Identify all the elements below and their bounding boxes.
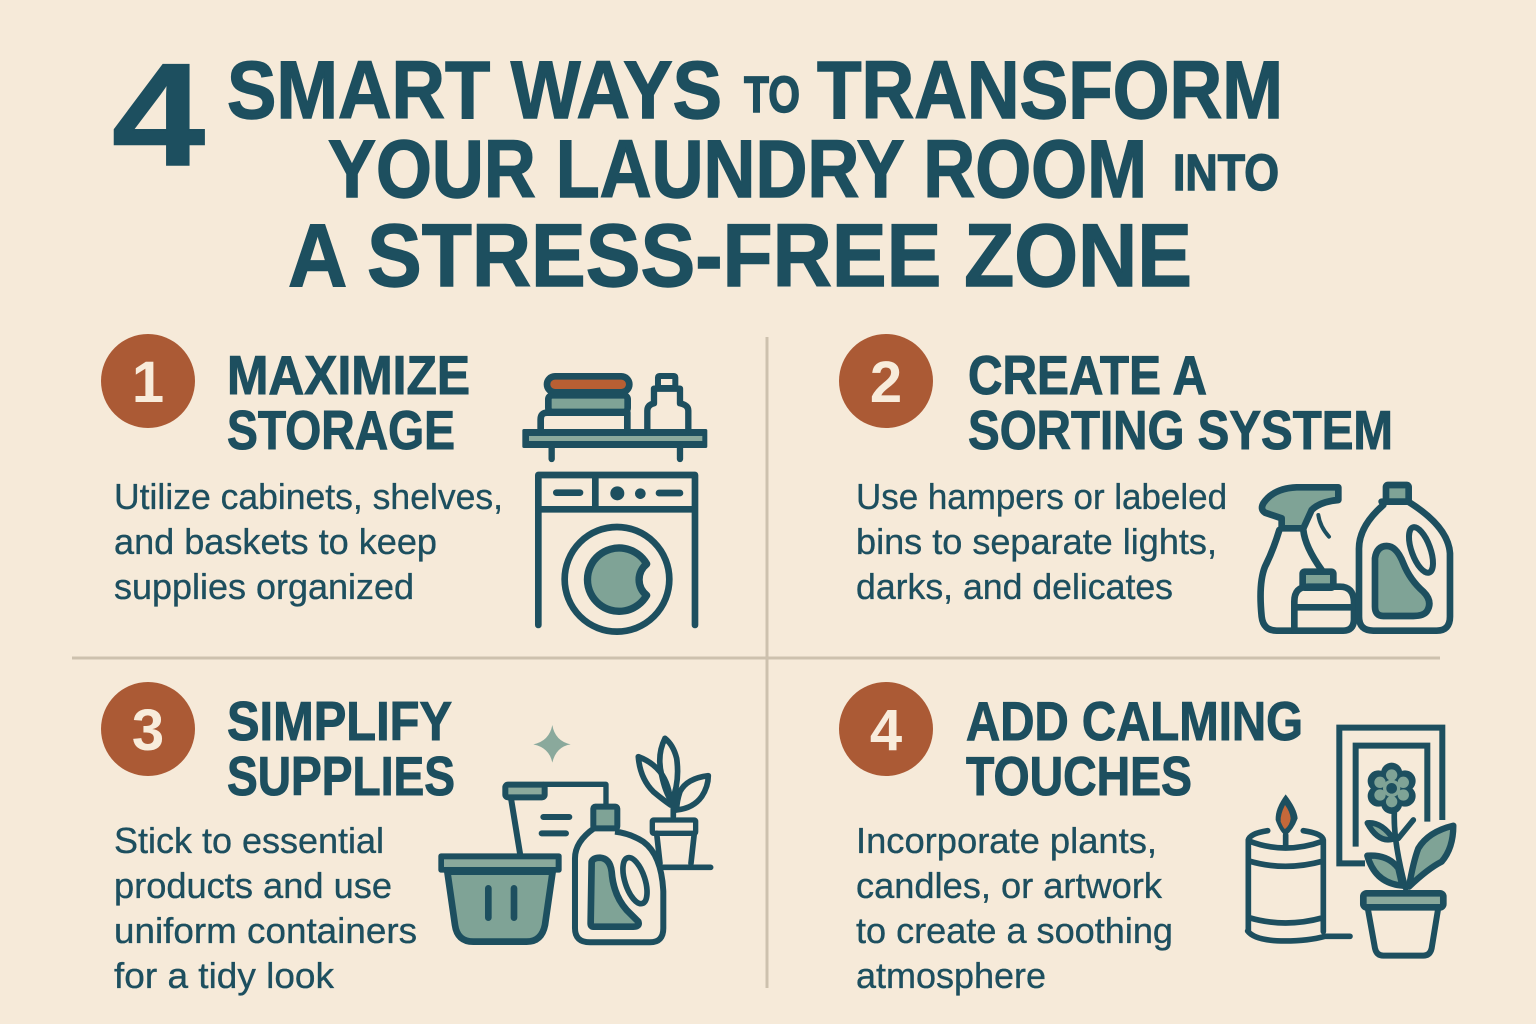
number badge 4 (839, 682, 933, 776)
panel: sorting system (839, 334, 1450, 631)
heading: add calming touches: ADD CALMING (966, 690, 1303, 752)
title: 4 (112, 33, 205, 196)
panel: simplify supplies (101, 682, 711, 996)
heading: maximize storage (227, 344, 470, 461)
number badge 1 (101, 334, 195, 428)
title: INTO (1173, 144, 1279, 201)
panel: calming touches (839, 682, 1453, 996)
body text 4: candles, or artwork (856, 865, 1163, 906)
title: TRANSFORM (817, 45, 1283, 136)
body text 2: darks, and delicates (856, 566, 1173, 607)
title: A STRESS-FREE ZONE (288, 205, 1192, 305)
heading: create a sorting system (968, 344, 1393, 461)
body text 4: atmosphere (856, 955, 1046, 996)
heading: maximize storage: MAXIMIZE (227, 344, 470, 406)
heading: maximize storage: STORAGE (227, 399, 455, 461)
icon: basket, detergent bottle, plant and sparkle (438, 725, 711, 942)
number badge 3: 3 (132, 698, 164, 763)
body text 4: Incorporate plants, (856, 820, 1157, 861)
heading: simplify supplies: SUPPLIES (227, 745, 455, 807)
body text 3: for a tidy look (114, 955, 335, 996)
icon: candle, framed art and potted flower (1248, 728, 1453, 956)
heading: create a sorting system: CREATE A (968, 344, 1207, 406)
icon: shelf and washing machine (522, 376, 707, 632)
number badge 2: 2 (870, 350, 902, 415)
heading: create a sorting system: SORTING SYSTEM (968, 399, 1393, 461)
body text 3: products and use (114, 865, 392, 906)
body text 3: Stick to essential (114, 820, 384, 861)
body text 4 (856, 820, 1173, 996)
number badge 3 (101, 682, 195, 776)
body text 1: Utilize cabinets, shelves, (114, 476, 503, 517)
number badge 1: 1 (132, 350, 164, 415)
heading: simplify supplies (227, 690, 455, 807)
panel: maximize storage (101, 334, 707, 632)
body text 4: to create a soothing (856, 910, 1173, 951)
title: TO (744, 66, 800, 123)
number badge 4: 4 (870, 698, 902, 763)
body text 2 (856, 476, 1227, 607)
icon: spray bottle, jar and detergent jug (1261, 485, 1450, 631)
title: YOUR LAUNDRY ROOM (328, 124, 1147, 215)
heading: add calming touches: TOUCHES (966, 745, 1192, 807)
heading: simplify supplies: SIMPLIFY (227, 690, 452, 752)
body text 3 (114, 820, 417, 996)
heading: add calming touches (966, 690, 1303, 807)
body text 3: uniform containers (114, 910, 417, 951)
body text 1: and baskets to keep (114, 521, 437, 562)
body text 2: bins to separate lights, (856, 521, 1217, 562)
title: SMART WAYS (227, 45, 722, 136)
body text 2: Use hampers or labeled (856, 476, 1227, 517)
title (112, 33, 1283, 305)
body text 1 (114, 476, 503, 607)
number badge 2 (839, 334, 933, 428)
body text 1: supplies organized (114, 566, 414, 607)
